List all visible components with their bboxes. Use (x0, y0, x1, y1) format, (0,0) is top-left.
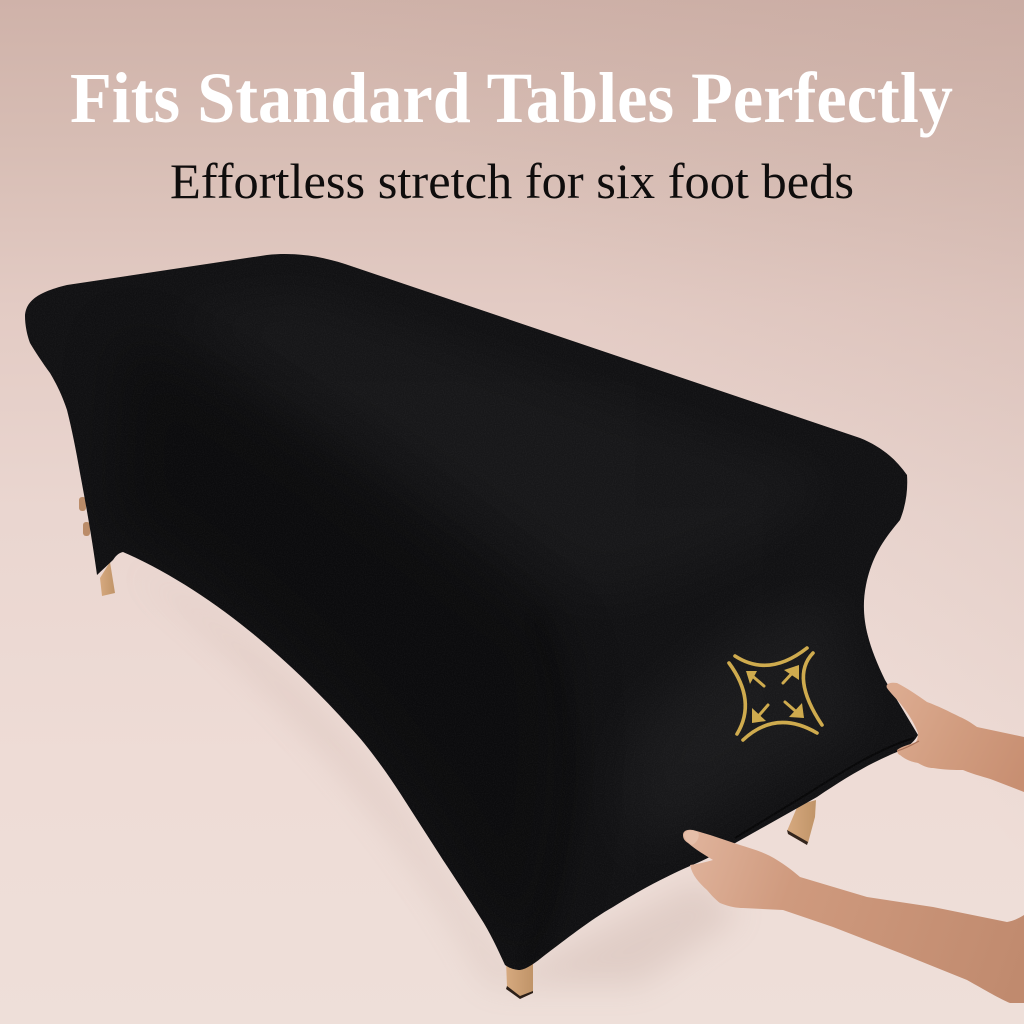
table leg: back left (79, 497, 115, 596)
left thumbnail (684, 830, 699, 845)
corner fold line (528, 617, 569, 962)
black stretch table cover (25, 254, 918, 970)
floor shadow (135, 570, 740, 985)
left hand and arm (683, 830, 1024, 1003)
fabric grain (30, 256, 912, 970)
table leg: back right (787, 800, 816, 845)
right hand finger crease (897, 741, 919, 751)
subtitle: Effortless stretch for six foot beds (170, 153, 854, 209)
title: Fits Standard Tables Perfectly (70, 58, 953, 138)
stretch icon (729, 648, 822, 740)
table leg: front (506, 958, 533, 999)
lighter top surface (150, 285, 840, 600)
lighter end panel (680, 677, 762, 762)
bottom hem (735, 738, 914, 838)
shaded long edge crease (279, 656, 469, 900)
right hand and arm (887, 683, 1024, 792)
